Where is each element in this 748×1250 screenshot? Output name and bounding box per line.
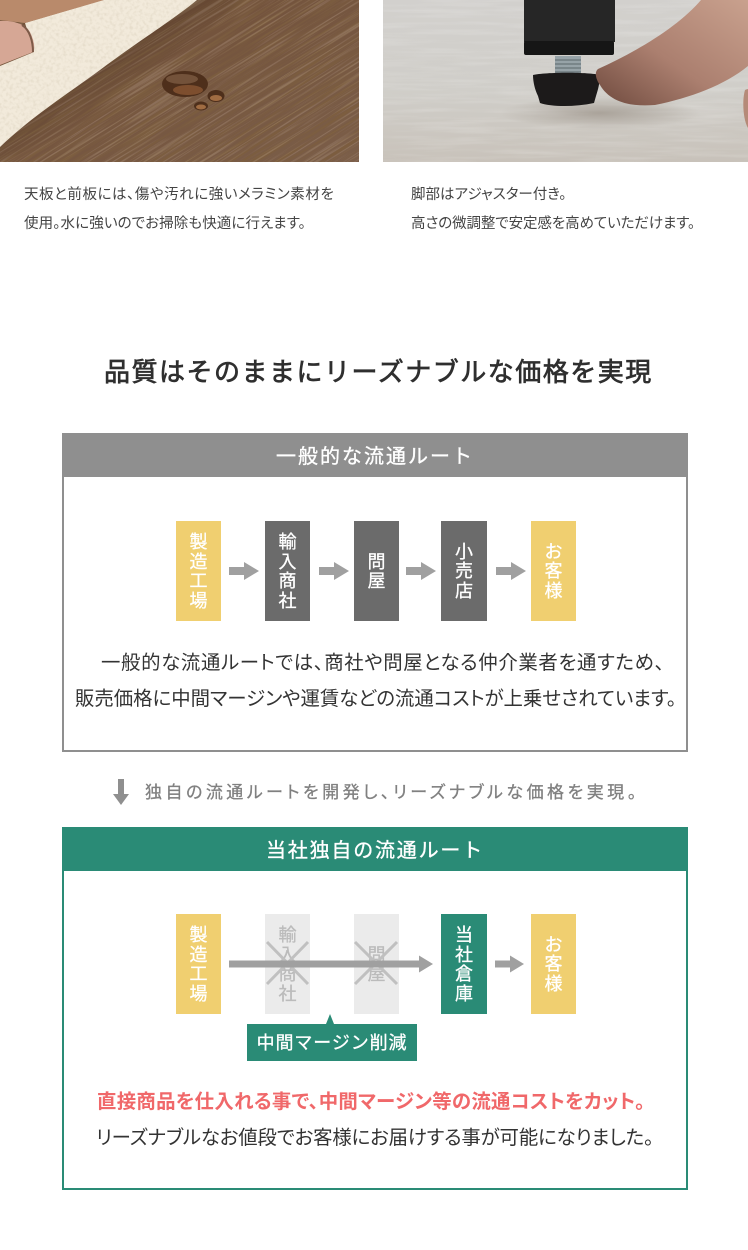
- box: customer: [531, 521, 576, 621]
- box: factory: 造: [190, 552, 208, 572]
- box: importer crossed out: 商: [278, 964, 296, 984]
- photo: towel wiping water drops off wood surface: [0, 0, 359, 162]
- text: explanation: 販売価格に中間マージンや運賃などの流通コストが上乗せされています。: [75, 688, 676, 710]
- arrow: [319, 562, 349, 580]
- box: factory: 製: [190, 925, 208, 945]
- box: customer: 様: [544, 974, 562, 994]
- box: importer: 商: [278, 571, 296, 591]
- box: customer: お: [544, 542, 562, 562]
- caption: adjuster foot: 脚部はアジャスター付き。: [411, 187, 566, 203]
- callout: margin reduction: [247, 1014, 417, 1061]
- caption: melamine top: 使用。水に強いのでお掃除も快適に行えます。: [24, 216, 306, 232]
- box: importer: [265, 521, 310, 621]
- caption: adjuster foot: 高さの微調整で安定感を高めていただけます。: [411, 216, 695, 232]
- box: wholesaler crossed out: 屋: [368, 964, 386, 984]
- crosses and long arrow: [229, 941, 433, 985]
- box: wholesaler: 屋: [368, 571, 386, 591]
- box: factory: 造: [190, 944, 208, 964]
- text: explanation: [96, 1091, 654, 1149]
- panel: general distribution route: [62, 433, 688, 752]
- callout: margin reduction: 中間マージン削減: [257, 1033, 407, 1053]
- text: transition statement: 独自の流通ルートを開発し、リーズナブルな価格を実現。: [145, 783, 640, 802]
- arrow: [496, 562, 526, 580]
- heading: own route: 当社独自の流通ルート: [266, 840, 484, 862]
- box: importer crossed out: [265, 914, 310, 1014]
- heading: own route: [62, 827, 688, 871]
- box: wholesaler crossed out: 問: [368, 944, 386, 964]
- text: explanation: 直接商品を仕入れる事で、中間マージン等の流通コストをカット。: [97, 1091, 645, 1113]
- box: importer crossed out: 輸: [278, 925, 296, 945]
- box: customer: お: [544, 935, 562, 955]
- box: retailer: 売: [455, 561, 473, 581]
- box: importer crossed out: 社: [278, 984, 296, 1004]
- box: own warehouse: [441, 914, 487, 1014]
- arrow: [495, 956, 524, 972]
- text: explanation: リーズナブルなお値段でお客様にお届けする事が可能になりました。: [96, 1127, 654, 1149]
- box: importer: 社: [278, 590, 296, 610]
- box: own warehouse: 当: [455, 925, 473, 945]
- caption: melamine top: [24, 186, 334, 232]
- box: factory: 工: [190, 964, 208, 984]
- caption: melamine top: 天板と前板には、傷や汚れに強いメラミン素材を: [24, 187, 334, 203]
- photo: adjuster foot being turned by a finger: [383, 0, 748, 162]
- box: importer: 入: [278, 552, 296, 572]
- box: own warehouse: 社: [455, 944, 473, 964]
- box: factory: 場: [190, 984, 208, 1004]
- heading: general route: 一般的な流通ルート: [276, 446, 474, 468]
- box: retailer: [441, 521, 487, 621]
- box: wholesaler: [354, 521, 399, 621]
- text: explanation: 一般的な流通ルートでは、商社や問屋となる仲介業者を通すため、: [101, 652, 665, 674]
- box: own warehouse: 倉: [455, 964, 473, 984]
- box: importer crossed out: 入: [278, 944, 296, 964]
- box: retailer: 店: [455, 581, 473, 601]
- box: factory: 場: [190, 590, 208, 610]
- box: customer: 様: [544, 581, 562, 601]
- box: retailer: 小: [455, 542, 473, 562]
- box: importer: 輸: [278, 532, 296, 552]
- title: 品質はそのままにリーズナブルな価格を実現: [104, 357, 653, 387]
- arrow: [406, 562, 436, 580]
- box: customer: [531, 914, 576, 1014]
- box: customer: 客: [544, 561, 562, 581]
- box: wholesaler: 問: [368, 552, 386, 572]
- box: factory: 製: [190, 532, 208, 552]
- panel: our own distribution route: [62, 827, 688, 1190]
- arrow: [229, 562, 259, 580]
- box: own warehouse: 庫: [455, 984, 473, 1004]
- arrow: down: [113, 779, 129, 805]
- caption: adjuster foot: [411, 186, 695, 232]
- box: wholesaler crossed out: [354, 914, 399, 1014]
- box: factory: 工: [190, 571, 208, 591]
- text: explanation: [75, 652, 676, 710]
- box: factory: [176, 914, 221, 1014]
- heading: general route: [62, 433, 688, 477]
- box: customer: 客: [544, 954, 562, 974]
- box: factory: [176, 521, 221, 621]
